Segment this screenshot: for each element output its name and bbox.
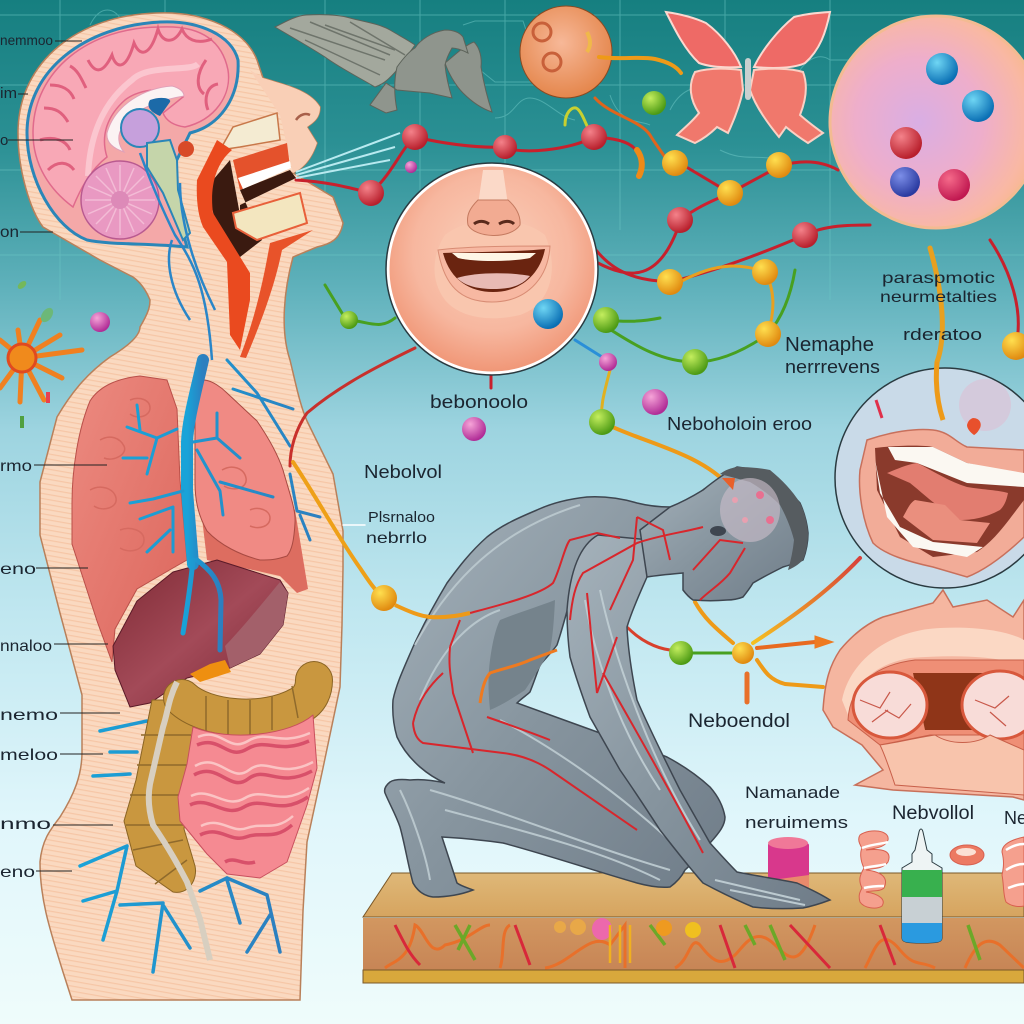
left callout labels: rmo (0, 458, 32, 475)
spray lines from mouth (296, 133, 400, 178)
background chart grid and traces (0, 0, 1024, 300)
lower jaw muscle (233, 193, 307, 240)
panel: human torso cross-section (18, 13, 343, 1000)
central arrow nodes (669, 641, 754, 665)
exposed brain speckle (720, 478, 780, 542)
nose (467, 200, 520, 236)
panel: smiling face circle (386, 163, 598, 375)
ascending colon (124, 700, 200, 892)
abdomen shading (488, 600, 555, 710)
icon: pink jar (768, 837, 809, 890)
icon: eye-drop bottle (902, 829, 942, 943)
table top (363, 873, 1024, 917)
lips outline (438, 246, 550, 302)
colon segment lines (126, 686, 298, 884)
liver (113, 560, 288, 707)
left callout labels: nnaloo (0, 638, 52, 655)
left callout labels: im (0, 85, 17, 102)
icon: star neuron (0, 279, 110, 428)
liver lobe (225, 582, 288, 668)
strata beads (554, 918, 701, 963)
panel: nasal cross-section (823, 590, 1024, 800)
tongue (887, 463, 1008, 520)
upper teeth (888, 447, 1024, 487)
lower teeth (875, 460, 983, 557)
open mouth (443, 249, 545, 292)
text labels: rderatoo (903, 325, 982, 344)
text labels: neurmetalties (880, 289, 997, 306)
text labels: Neboendol (688, 711, 790, 732)
inner nasal band (842, 628, 1024, 720)
upper palate (220, 113, 280, 150)
ventricle (148, 98, 170, 116)
mouth cavity (207, 160, 296, 257)
drops (967, 418, 981, 435)
left lung (72, 376, 187, 662)
hair (720, 467, 808, 570)
text labels: Plsrnaloo (368, 509, 435, 526)
left callout labels: nmo (0, 816, 51, 833)
strata waves (385, 925, 1024, 968)
icon: butterfly (666, 12, 830, 143)
body silhouette (18, 13, 343, 1000)
bronchial tree (80, 360, 320, 972)
left callout labels: on (0, 224, 19, 241)
left callout labels: nemo (0, 707, 58, 724)
nose bridge highlight (478, 170, 508, 205)
right polyp (962, 671, 1024, 739)
icon: orange orb (520, 6, 681, 98)
neck and head (640, 467, 808, 601)
polyp veins (860, 692, 1009, 726)
left polyp (853, 672, 927, 738)
text labels: paraspmotic (882, 270, 995, 287)
icon: grey bird (275, 15, 492, 113)
table base strip (363, 970, 1024, 983)
nostrils (474, 221, 514, 224)
callosum arc (107, 86, 184, 152)
panel: open mouth circle (835, 362, 1024, 588)
bird body and head (370, 30, 468, 113)
pathway lines (290, 98, 1018, 598)
left callout labels: nemmoo (0, 32, 53, 48)
lips (860, 429, 1024, 577)
transverse colon (182, 680, 314, 718)
text labels: neruimems (745, 813, 848, 832)
text labels: nebrrlo (366, 530, 427, 547)
upper lip fold (880, 735, 1024, 795)
wooden table (363, 873, 1024, 983)
text labels: Namanade (745, 783, 840, 802)
small intestine (178, 715, 317, 878)
text labels: Nemaphe (785, 334, 874, 356)
icon: pills (859, 831, 1024, 908)
left callout labels: o (0, 132, 8, 149)
skull membrane (27, 22, 238, 247)
right lung front (195, 380, 295, 560)
text labels: nerrrevens (785, 357, 880, 377)
red airway tract (197, 140, 250, 350)
cerebellum (81, 161, 159, 239)
upper gum and teeth (233, 143, 290, 190)
text labels: Nebolvol (364, 462, 442, 482)
brain (33, 27, 229, 207)
thalamus sphere (121, 109, 159, 147)
right lung back (195, 460, 308, 593)
upper teeth (452, 253, 536, 261)
text labels: Neboholoin eroo (667, 414, 812, 434)
nose and face tint (250, 70, 320, 173)
nostril (296, 114, 310, 120)
left callout labels: meloo (0, 747, 58, 764)
tongue (457, 273, 530, 289)
eye (710, 526, 726, 536)
cream tube (149, 682, 210, 960)
lung texture (90, 398, 270, 551)
kneeling grey figure (385, 467, 830, 909)
mouth interior (875, 446, 1024, 557)
pathway nodes (340, 91, 1024, 611)
nasal cavity (913, 673, 1000, 730)
muscle highlights (400, 505, 690, 880)
brainstem (147, 140, 190, 240)
text labels: Nebvollol (892, 803, 974, 824)
right wing (445, 42, 492, 112)
torso and legs (385, 490, 725, 897)
table strata (363, 918, 1024, 970)
left callout labels: eno (0, 561, 36, 578)
nasal rim (848, 660, 1024, 760)
neck vessels (140, 153, 215, 360)
arm (567, 535, 830, 909)
text labels: bebonoolo (430, 392, 528, 412)
text labels (364, 270, 1024, 832)
left callout labels: eno (0, 864, 35, 881)
arteries (413, 517, 745, 853)
left callout labels (0, 32, 120, 881)
smile cheek area (434, 220, 552, 318)
gallbladder duct (190, 660, 231, 682)
panel: top right cell circle (830, 16, 1024, 228)
pituitary (178, 141, 194, 157)
left wing (275, 15, 415, 87)
arrows near central node (628, 558, 860, 702)
